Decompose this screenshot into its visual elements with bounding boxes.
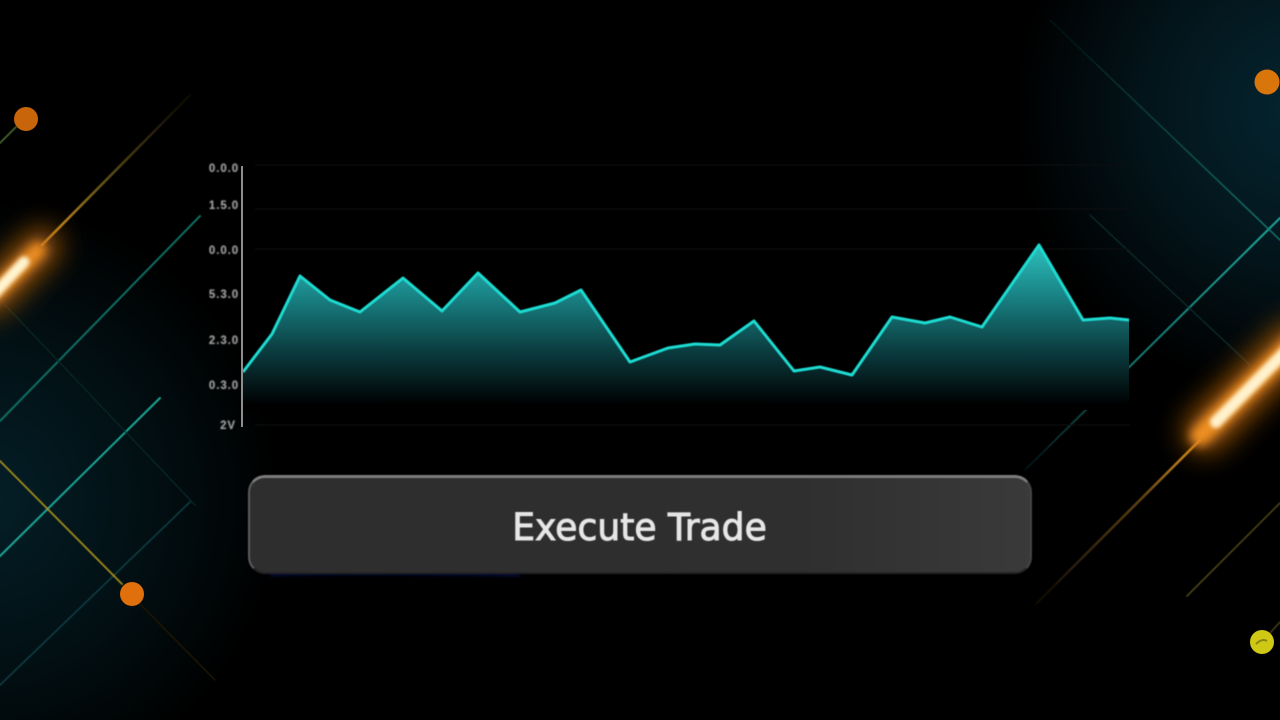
y axis labels: 1.5.0 — [209, 200, 239, 212]
icon: orange dot bottom left — [120, 582, 144, 606]
chart y axis — [241, 166, 243, 427]
chart line — [243, 245, 1129, 375]
y axis labels: 2V — [220, 420, 236, 432]
y axis labels: 0.3.0 — [209, 380, 239, 392]
chart area fill — [243, 245, 1129, 410]
y axis labels: 2.3.0 — [209, 335, 239, 347]
chart grid lines — [255, 165, 1130, 425]
button: Execute Trade: Execute Trade — [513, 506, 767, 549]
icon: right light flare — [1200, 342, 1280, 436]
icon: orange dot top left — [14, 107, 38, 131]
icon: orange dot top right — [1254, 70, 1280, 94]
icon: yellow coin bottom right — [1250, 630, 1274, 654]
button: Execute Trade — [248, 475, 1032, 574]
y axis labels — [209, 163, 239, 432]
y axis labels: 0.0.0 — [209, 163, 239, 175]
chart: teal area chart with axis — [209, 163, 1130, 432]
button underglow — [270, 572, 520, 574]
icon: left light flare — [0, 246, 42, 298]
y axis labels: 5.3.0 — [209, 289, 239, 301]
y axis labels: 0.0.0 — [209, 245, 239, 257]
